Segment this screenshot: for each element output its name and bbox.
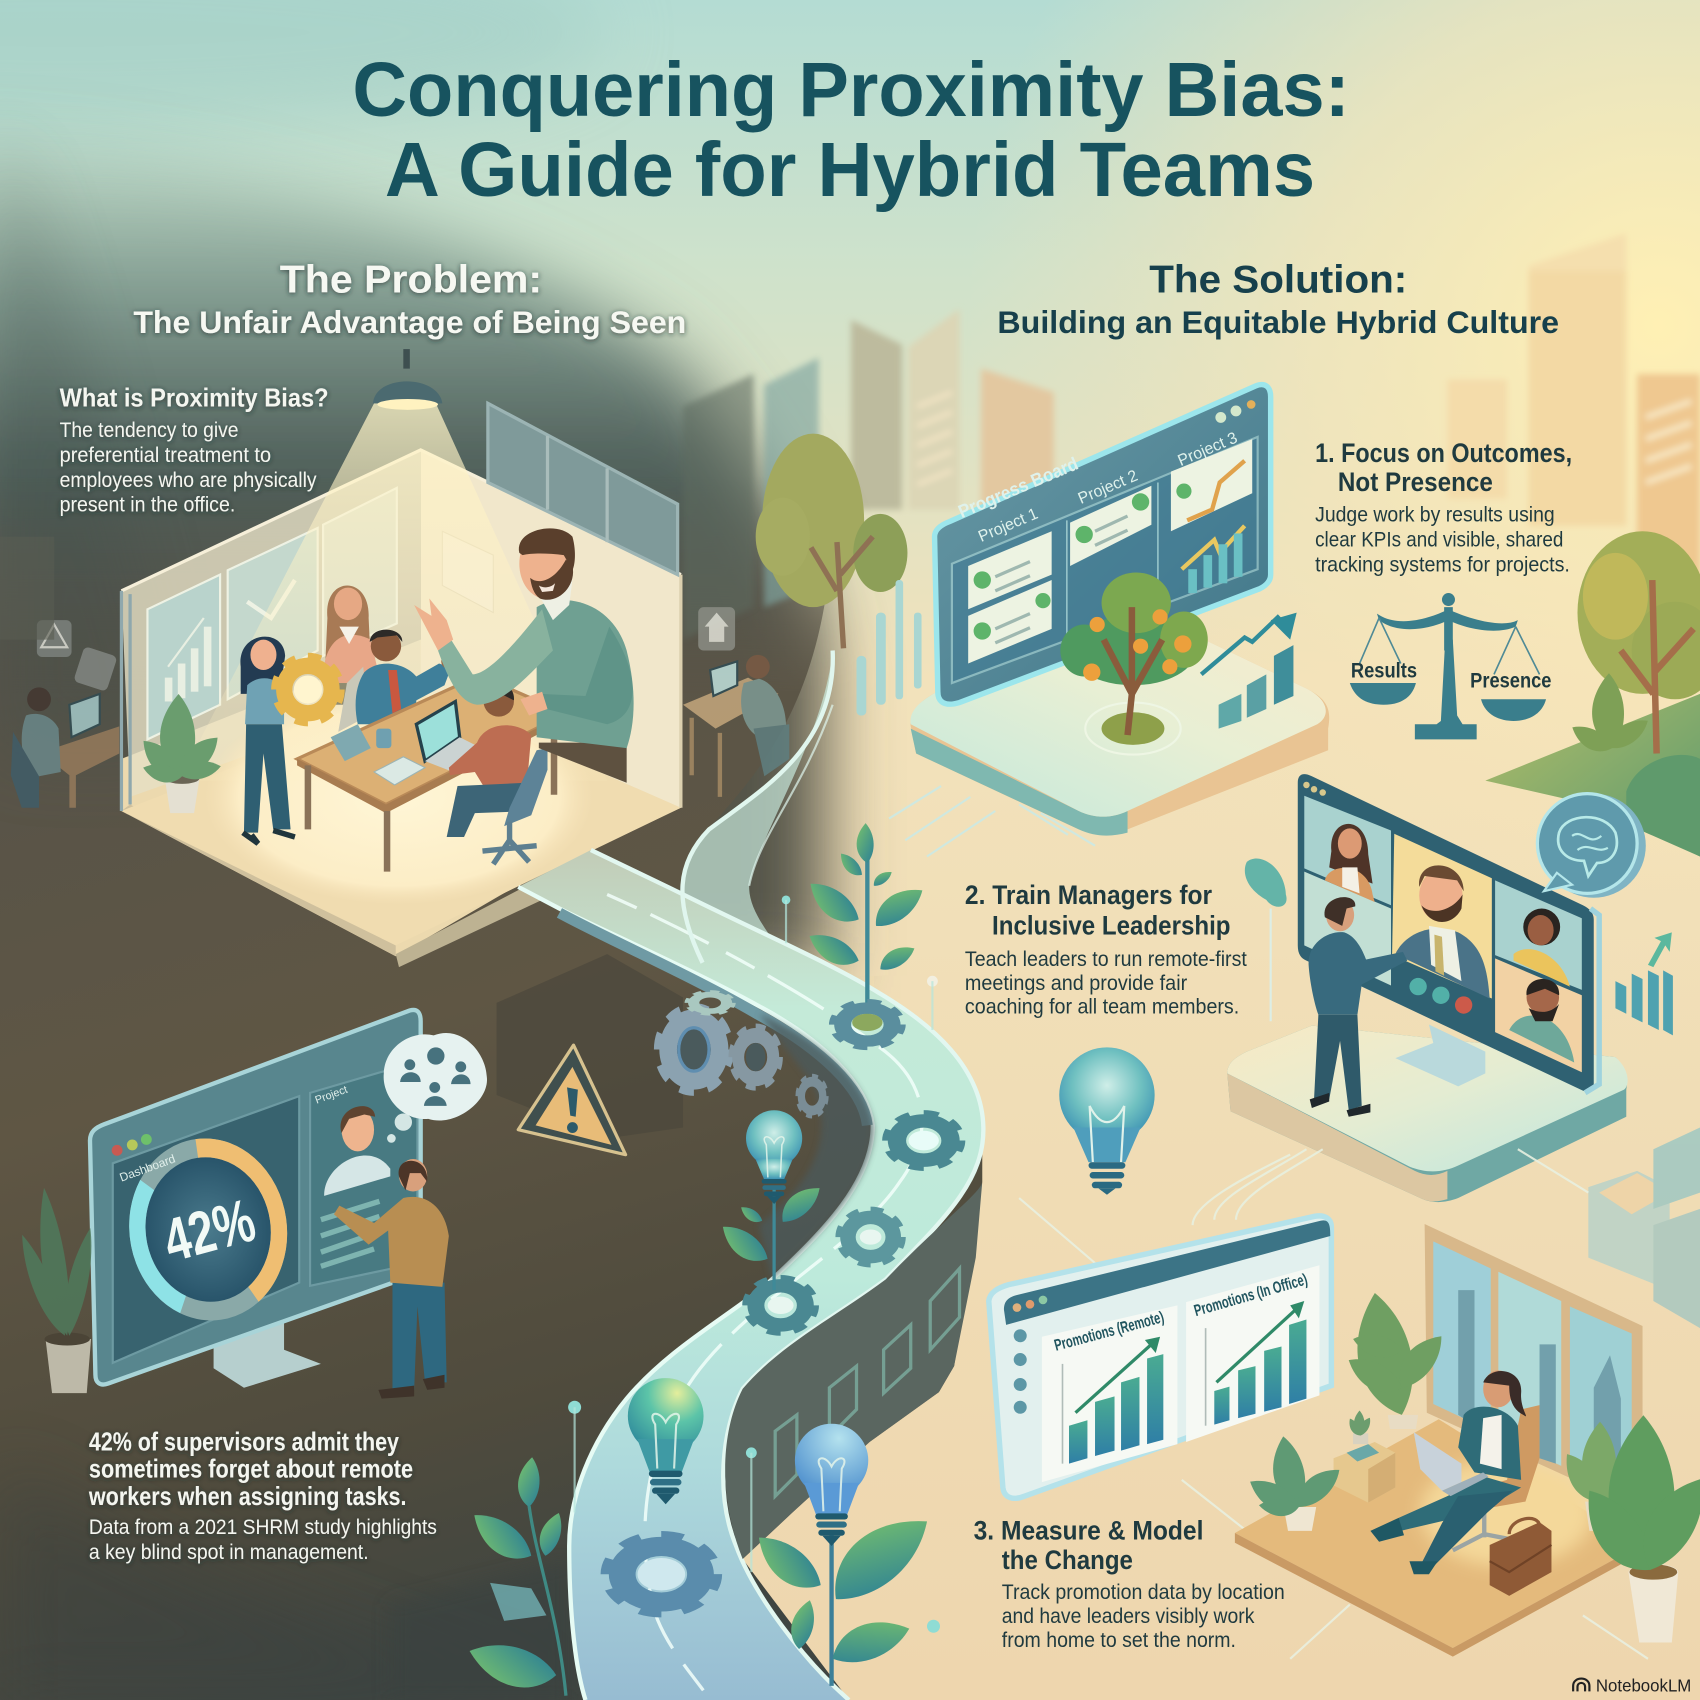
mini bars [1615, 932, 1673, 1035]
monitor stand [1395, 1025, 1485, 1086]
path: glowing road [518, 651, 983, 1700]
side table [1334, 1411, 1395, 1503]
small hexagon icon [1245, 859, 1287, 1021]
brain speech bubble [1537, 794, 1646, 898]
monitor with 42% statistic [90, 1010, 421, 1388]
rising bars [1201, 613, 1297, 729]
road gears [610, 992, 959, 1611]
woman holding gear [240, 637, 339, 843]
monitor with 42% statistic: Project [314, 1084, 349, 1107]
participant: man green [1509, 979, 1574, 1062]
text block: 42% statistic: 42% of supervisors admit they [89, 1427, 399, 1457]
tree left of board [756, 434, 907, 648]
text block: focus on outcomes: Judge work by results using [1315, 501, 1555, 526]
bearded presenter [414, 528, 634, 783]
panel: measurement charts window [989, 1216, 1331, 1498]
wall charts [147, 575, 220, 739]
text block: focus on outcomes: tracking systems for projects. [1315, 551, 1570, 576]
floor plant [1244, 1434, 1346, 1531]
woman at rear [323, 585, 379, 705]
board screen: Project 3 [1175, 429, 1240, 470]
text block: focus on outcomes: clear KPIs and visible, shared [1315, 526, 1563, 551]
tall window plant [1342, 1289, 1451, 1429]
floor [1235, 1419, 1640, 1648]
heading: the problem [133, 259, 686, 340]
text block: what is proximity bias: preferential treatment to [60, 442, 271, 467]
side buildings [1588, 1128, 1700, 1328]
panel: office room under spotlight [121, 349, 681, 967]
text block: measure and model [974, 1515, 1285, 1652]
text block: 42% statistic: a key blind spot in management. [89, 1539, 369, 1564]
outside window [488, 403, 678, 575]
glowing pins [568, 896, 940, 1633]
thought bubble: people [384, 1033, 487, 1121]
heading: the solution [997, 259, 1559, 340]
monitor with 42% statistic: Dashboard [118, 1152, 177, 1185]
text block: what is proximity bias: employees who are physically [60, 467, 317, 492]
briefcase [1490, 1518, 1551, 1596]
data pillars [857, 580, 922, 716]
blue bulb plant [748, 1424, 942, 1686]
scale labels: Presence [1470, 667, 1551, 692]
heading: the problem: The Problem: [280, 259, 542, 302]
chart: in office promotions: Promotions (In Office) [1192, 1270, 1310, 1320]
text block: what is proximity bias [60, 383, 329, 517]
plant beside monitor [13, 1186, 99, 1393]
participant: woman [1325, 824, 1375, 902]
man working at laptop [447, 683, 548, 864]
city skyline: solution side [851, 233, 1700, 623]
panel: home office [1235, 1224, 1700, 1657]
text block: train managers: coaching for all team members. [965, 994, 1239, 1019]
man in mustard sweater [334, 1159, 449, 1399]
logo: NotebookLM: NotebookLM [1596, 1675, 1691, 1695]
room back walls [121, 450, 421, 797]
chart: in office promotions [1186, 1265, 1319, 1442]
text block: train managers [965, 879, 1247, 1019]
sprouting growth: plants, gears and bulbs on the road [463, 823, 959, 1698]
text block: 42% statistic: workers when assigning tasks. [88, 1481, 407, 1511]
chart: remote promotions [1042, 1305, 1177, 1482]
right tree and hill [1485, 531, 1700, 857]
table [297, 675, 566, 872]
window [1425, 1224, 1643, 1479]
text block: measure and model: Track promotion data by location [1002, 1579, 1285, 1604]
warning triangle [518, 1045, 626, 1155]
text block: 42% statistic: sometimes forget about remote [89, 1454, 413, 1484]
bulb plant [715, 1110, 826, 1290]
text block: 42% statistic: Data from a 2021 SHRM study highlights [89, 1514, 437, 1539]
text block: what is proximity bias: present in the office. [60, 492, 235, 517]
text block: train managers: Teach leaders to run remote-first [965, 946, 1247, 971]
donut chart [97, 1105, 319, 1354]
text block: measure and model: 3. Measure & Model [974, 1515, 1203, 1546]
panel: video call platform [1227, 774, 1673, 1202]
platform base [910, 621, 1329, 833]
board screen: Project 1 [976, 505, 1041, 546]
title: Conquering Proximity Bias: [352, 47, 1350, 133]
gears behind road [660, 1010, 826, 1115]
board label: Progress Board [955, 453, 1081, 522]
video call screen [1298, 774, 1599, 1093]
text block: measure and model: from home to set the norm. [1002, 1627, 1236, 1652]
text block: focus on outcomes [1315, 437, 1572, 576]
text block: measure and model: the Change [1002, 1544, 1133, 1575]
heading: the solution: The Solution: [1149, 259, 1407, 302]
plant at bottom left of road [463, 1456, 567, 1698]
text block: train managers: Inclusive Leadership [992, 910, 1231, 941]
presenter on screen [1395, 865, 1490, 1014]
text block: what is proximity bias: What is Proximity Bias? [60, 383, 329, 413]
man in blue suit [338, 630, 456, 732]
room floor [121, 640, 681, 956]
text block: 42% statistic [88, 1427, 437, 1564]
plant [135, 694, 225, 813]
board screen [935, 385, 1271, 704]
text block: what is proximity bias: The tendency to give [60, 417, 239, 442]
connectors [889, 786, 1095, 857]
title: A Guide for Hybrid Teams [385, 127, 1315, 213]
lightbulb [1059, 1047, 1155, 1195]
scale: results vs presence [1350, 593, 1546, 739]
dark problem side backdrop [0, 130, 982, 1700]
ceiling lamp [373, 349, 442, 410]
board screen: Project 2 [1075, 467, 1140, 508]
text block: train managers: meetings and provide fair [965, 970, 1187, 995]
connector lines [1019, 1149, 1648, 1659]
sprout on cog [802, 823, 929, 1046]
woman on laptop [1370, 1370, 1540, 1574]
right remote worker scene [683, 607, 789, 797]
tree with oranges [1060, 572, 1208, 755]
green bulb [628, 1378, 704, 1504]
text block: measure and model: and have leaders visibly work [1002, 1603, 1255, 1628]
text block: train managers: 2. Train Managers for [965, 879, 1213, 910]
chart: remote promotions: Promotions (Remote) [1052, 1308, 1166, 1355]
scale labels [1351, 658, 1551, 692]
dark wall beside road with panels [725, 1014, 982, 1559]
panel: progress board platform [889, 385, 1329, 857]
text block: focus on outcomes: 1. Focus on Outcomes, [1315, 437, 1572, 468]
heading: the problem: The Unfair Advantage of Being Seen [133, 305, 686, 340]
title [352, 47, 1350, 213]
heading: the solution: Building an Equitable Hybrid Culture [997, 305, 1559, 340]
left remote worker scene [0, 537, 119, 808]
scale labels: Results [1351, 658, 1417, 683]
spotlight cone [179, 403, 607, 781]
text block: focus on outcomes: Not Presence [1338, 466, 1493, 497]
man in suit standing [1309, 897, 1407, 1117]
right plants [1556, 1415, 1700, 1643]
stat value: 42% [156, 1186, 262, 1275]
participant: woman yellow [1514, 909, 1570, 987]
